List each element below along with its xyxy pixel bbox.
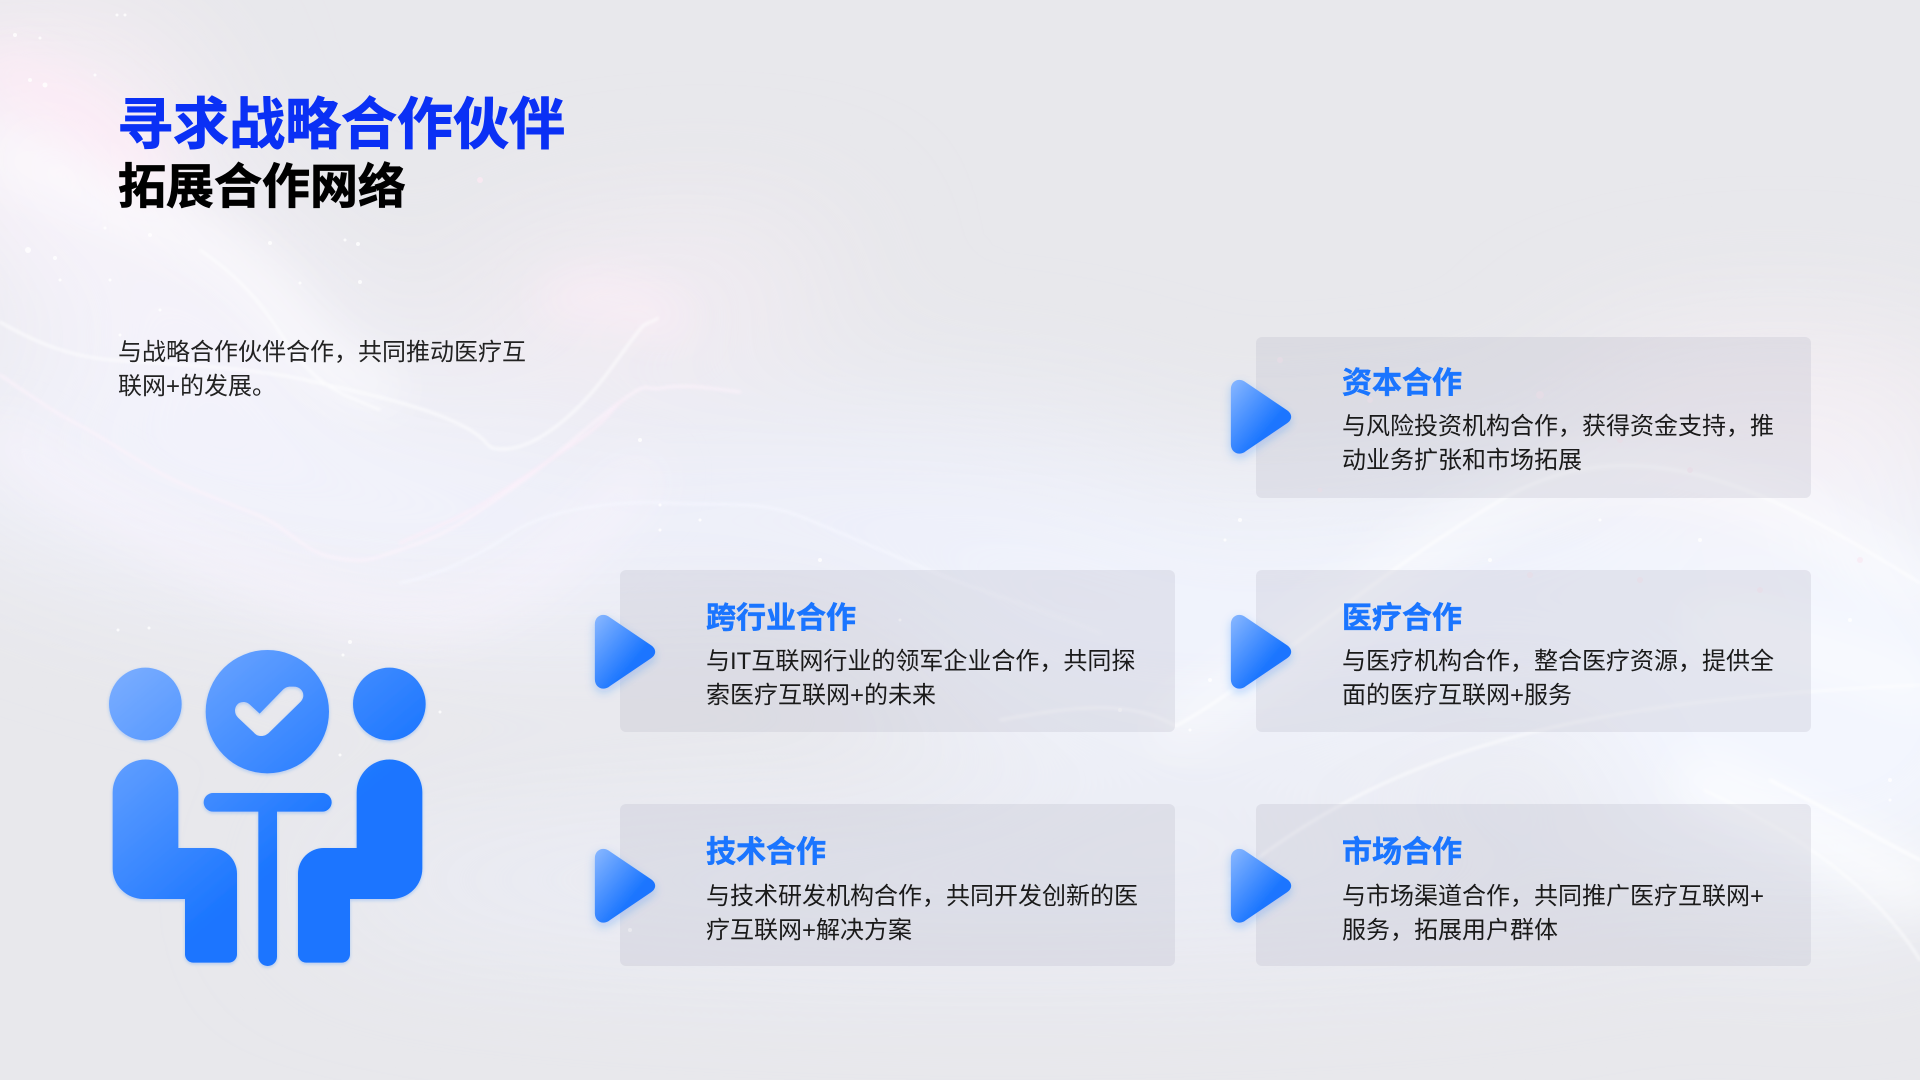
- card description: 与IT互联网行业的领军企业合作，共同探: [706, 648, 1135, 675]
- card description: [1342, 883, 1764, 944]
- panel: 医疗合作: [1256, 570, 1811, 732]
- card description: 服务，拓展用户群体: [1342, 917, 1558, 944]
- card heading: 资本合作: [1342, 367, 1462, 400]
- panel: 资本合作: [1256, 337, 1811, 498]
- icon: arrow: [1226, 614, 1296, 697]
- card description: [706, 883, 1138, 944]
- intro text: 与战略合作伙伴合作，共同推动医疗互: [118, 339, 526, 366]
- icon: arrow: [1226, 848, 1294, 931]
- card description: [706, 648, 1135, 709]
- title: 寻求战略合作伙伴: [117, 93, 565, 156]
- icon: arrow: [1226, 379, 1296, 462]
- card heading: 医疗合作: [1342, 602, 1462, 635]
- card heading: 市场合作: [1342, 836, 1462, 869]
- intro text: [118, 339, 526, 400]
- card heading: 技术合作: [706, 836, 826, 869]
- card description: [1342, 648, 1774, 709]
- card description: 与医疗机构合作，整合医疗资源，提供全: [1342, 648, 1774, 675]
- card description: 索医疗互联网+的未来: [706, 682, 936, 709]
- card description: 疗互联网+解决方案: [706, 917, 912, 944]
- card description: [1342, 413, 1774, 474]
- icon: arrow: [590, 614, 658, 697]
- panel: 市场合作: [1256, 804, 1811, 966]
- card description: 与技术研发机构合作，共同开发创新的医: [706, 883, 1138, 910]
- panel: 技术合作: [620, 804, 1175, 966]
- intro text: 联网+的发展。: [118, 373, 276, 400]
- card description: 与风险投资机构合作，获得资金支持，推: [1342, 413, 1774, 440]
- card description: 面的医疗互联网+服务: [1342, 682, 1572, 709]
- subtitle: 拓展合作网络: [118, 161, 406, 214]
- card description: 与市场渠道合作，共同推广医疗互联网+: [1342, 883, 1764, 910]
- card description: 动业务扩张和市场拓展: [1342, 447, 1582, 474]
- icon: arrow: [590, 848, 658, 931]
- icon: two people at a table with check mark: [107, 650, 428, 969]
- card heading: 跨行业合作: [706, 602, 856, 635]
- panel: 跨行业合作: [620, 570, 1175, 732]
